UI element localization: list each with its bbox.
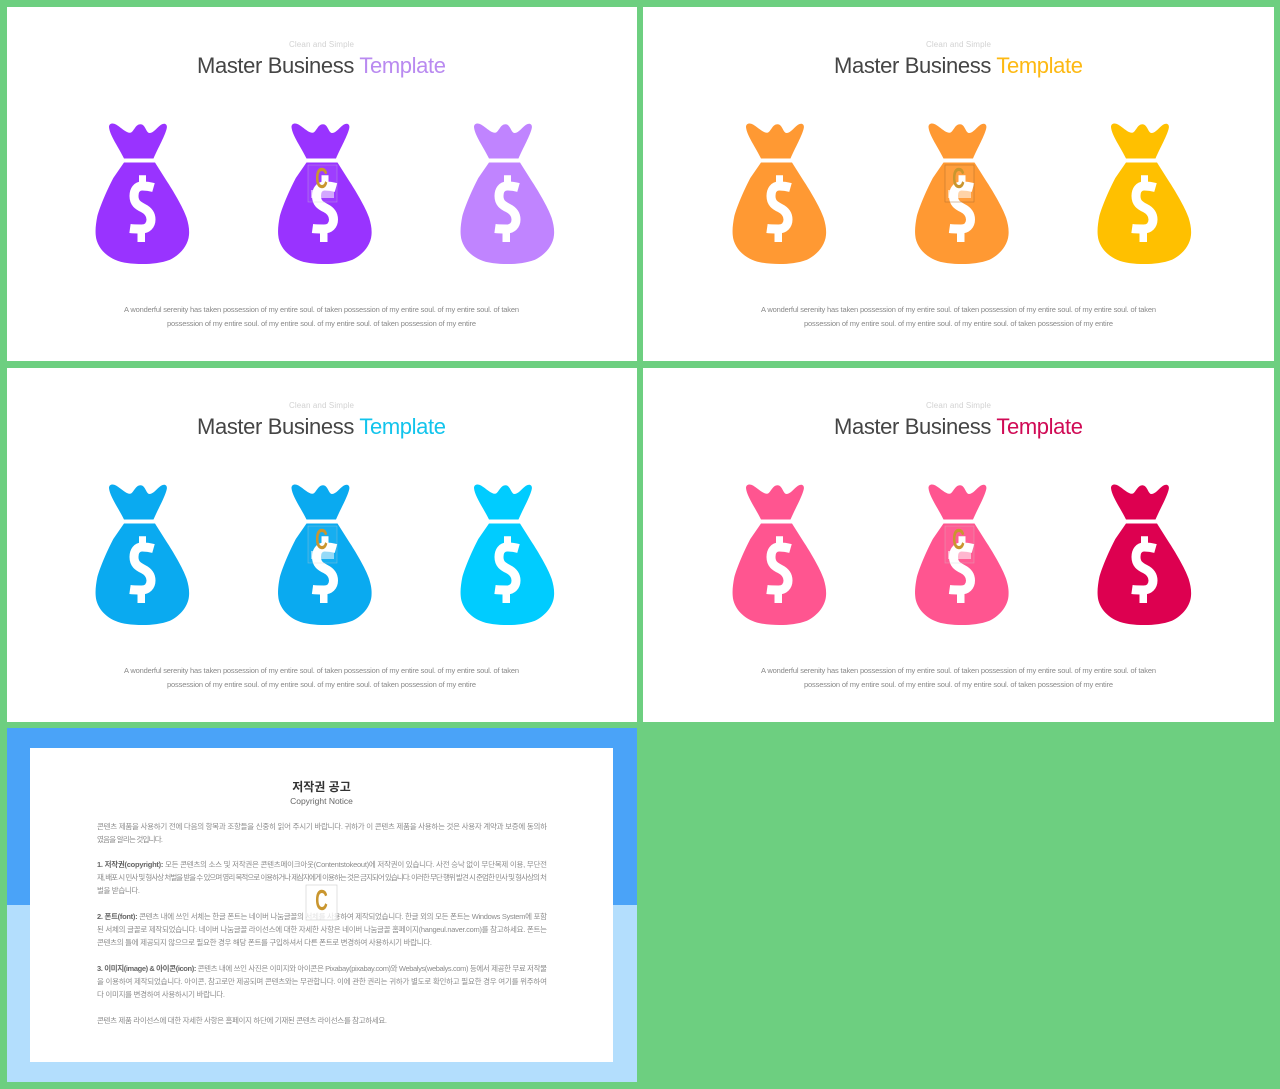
subtitle: Clean and Simple [926,401,992,410]
subtitle: Clean and Simple [289,40,355,49]
watermark logo [945,163,974,202]
icon: purple money bag 1 [96,123,189,264]
watermark logo [306,885,337,920]
icon: orange money bag 1 [733,123,826,264]
title: Master Business Template [197,414,446,439]
icon: blue money bag 2 [278,484,372,625]
title: Master Business Template [834,53,1083,78]
section 2: font: 2. 폰트(font): 콘텐츠 내에 쓰인 서체는 한글 폰트는 네이버 나눔글꼴의 서체를 사용하여 제작되었습니다. 한글 외의 모든 폰트는 Windows System에 포함 [97,911,547,921]
watermark logo: C [315,163,328,195]
section 2: font: 된 서체의 글꼴로 제작되었습니다. 네이버 나눔글꼴 라이선스에 대한 자세한 사항은 네이버 나눔글꼴 홈페이지(hangeul.naver.com)를 참고하세요. 폰트는 [97,924,547,934]
section 3: image and icon [97,963,547,999]
icon: pink money bag 1 [733,484,826,625]
title: Master Business Template [834,414,1083,439]
body text [124,305,519,328]
icon: yellow money bag 3 [1098,123,1191,264]
section 1: copyright: 재, 배포 시 민사 및 형사상 처벌을 받을 수 있으며 영리 목적으로 이용하거나 제삼자에게 이용하는 것은 금지되어 있습니다. 이러한 무단 행위 발견 시 준엄한 민사 및 형사상의 처 [97,872,547,882]
body text: possession of my entire soul. of my entire soul. of my entire soul. of taken possession of my entire [167,680,476,689]
body text [124,666,519,689]
icon: crimson money bag 3 [1098,484,1191,625]
icon: purple money bag 2 [278,123,372,264]
body text: possession of my entire soul. of my entire soul. of my entire soul. of taken possession of my entire [804,680,1113,689]
copyright heading [290,779,353,806]
body text: possession of my entire soul. of my entire soul. of my entire soul. of taken possession of my entire [167,319,476,328]
icon: cyan money bag 3 [461,484,554,625]
section 3: image and icon: 다 이미지를 변경하여 사용하시기 바랍니다. [97,989,225,999]
body text: possession of my entire soul. of my entire soul. of my entire soul. of taken possession of my entire [804,319,1113,328]
watermark logo: C [952,524,965,556]
section 2: font: 콘텐츠의 틀에 제공되지 않으므로 필요한 경우 해당 폰트를 구입하셔서 다른 폰트로 변경하여 사용하시기 바랍니다. [97,937,432,947]
watermark logo: C [315,524,328,556]
icon: light purple money bag 3 [461,123,554,264]
copyright heading: Copyright Notice [290,796,353,806]
section 1: copyright: 1. 저작권(copyright): 모든 콘텐츠의 소스 및 저작권은 콘텐츠메이크아웃(Contentstokeout)에 저작권이 있습니다. 사전 승낙 없이 무단복제 이용, 무단전 [97,859,547,869]
body text: A wonderful serenity has taken possession of my entire soul. of taken possession of my entire soul. of my entire soul. of taken [124,666,519,675]
panel: purple money bags [7,7,637,361]
title: Master Business Template [197,53,446,78]
watermark logo [945,524,974,563]
section 3: image and icon: 3. 이미지(image) & 아이콘(icon): 콘텐츠 내에 쓰인 사진은 이미지와 아이콘은 Pixabay(pixabay.com)와 Webalys(webalys.com) 등에서 제공한 무료 저작물 [97,963,547,973]
body text [761,666,1156,689]
body text: A wonderful serenity has taken possession of my entire soul. of taken possession of my entire soul. of my entire soul. of taken [124,305,519,314]
panel: blue money bags [7,368,637,722]
intro paragraph: 였음을 알리는 것입니다. [97,834,163,844]
watermark logo: C [952,163,965,195]
panel: copyright notice [7,728,637,1082]
section 2: font [97,911,547,947]
panel: pink money bags [643,368,1274,722]
intro paragraph: 콘텐츠 제품을 사용하기 전에 다음의 항목과 조항들을 신중히 읽어 주시기 바랍니다. 귀하가 이 콘텐츠 제품을 사용하는 것은 사용자 계약과 보증에 동의하 [97,821,547,831]
subtitle: Clean and Simple [926,40,992,49]
icon: orange money bag 2 [915,123,1009,264]
intro paragraph [97,821,547,844]
body text [761,305,1156,328]
icon: blue money bag 1 [96,484,189,625]
panel: orange money bags [643,7,1274,361]
closing line: 콘텐츠 제품 라이선스에 대한 자세한 사항은 홈페이지 하단에 기재된 콘텐츠 라이선스를 참고하세요. [97,1015,387,1025]
watermark logo [308,524,337,563]
section 3: image and icon: 을 이용하여 제작되었습니다. 아이콘, 참고로만 제공되며 콘텐츠와는 무관합니다. 이에 관한 권리는 귀하가 별도로 확인하고 필요한 경우 여기를 위주하여 [97,976,547,986]
copyright heading: 저작권 공고 [292,779,351,794]
body text: A wonderful serenity has taken possession of my entire soul. of taken possession of my entire soul. of my entire soul. of taken [761,666,1156,675]
watermark logo [308,163,337,202]
icon: pink money bag 2 [915,484,1009,625]
body text: A wonderful serenity has taken possession of my entire soul. of taken possession of my entire soul. of my entire soul. of taken [761,305,1156,314]
subtitle: Clean and Simple [289,401,355,410]
section 1: copyright: 벌을 받습니다. [97,885,140,895]
section 1: copyright [97,859,547,895]
watermark logo: C [315,885,328,917]
